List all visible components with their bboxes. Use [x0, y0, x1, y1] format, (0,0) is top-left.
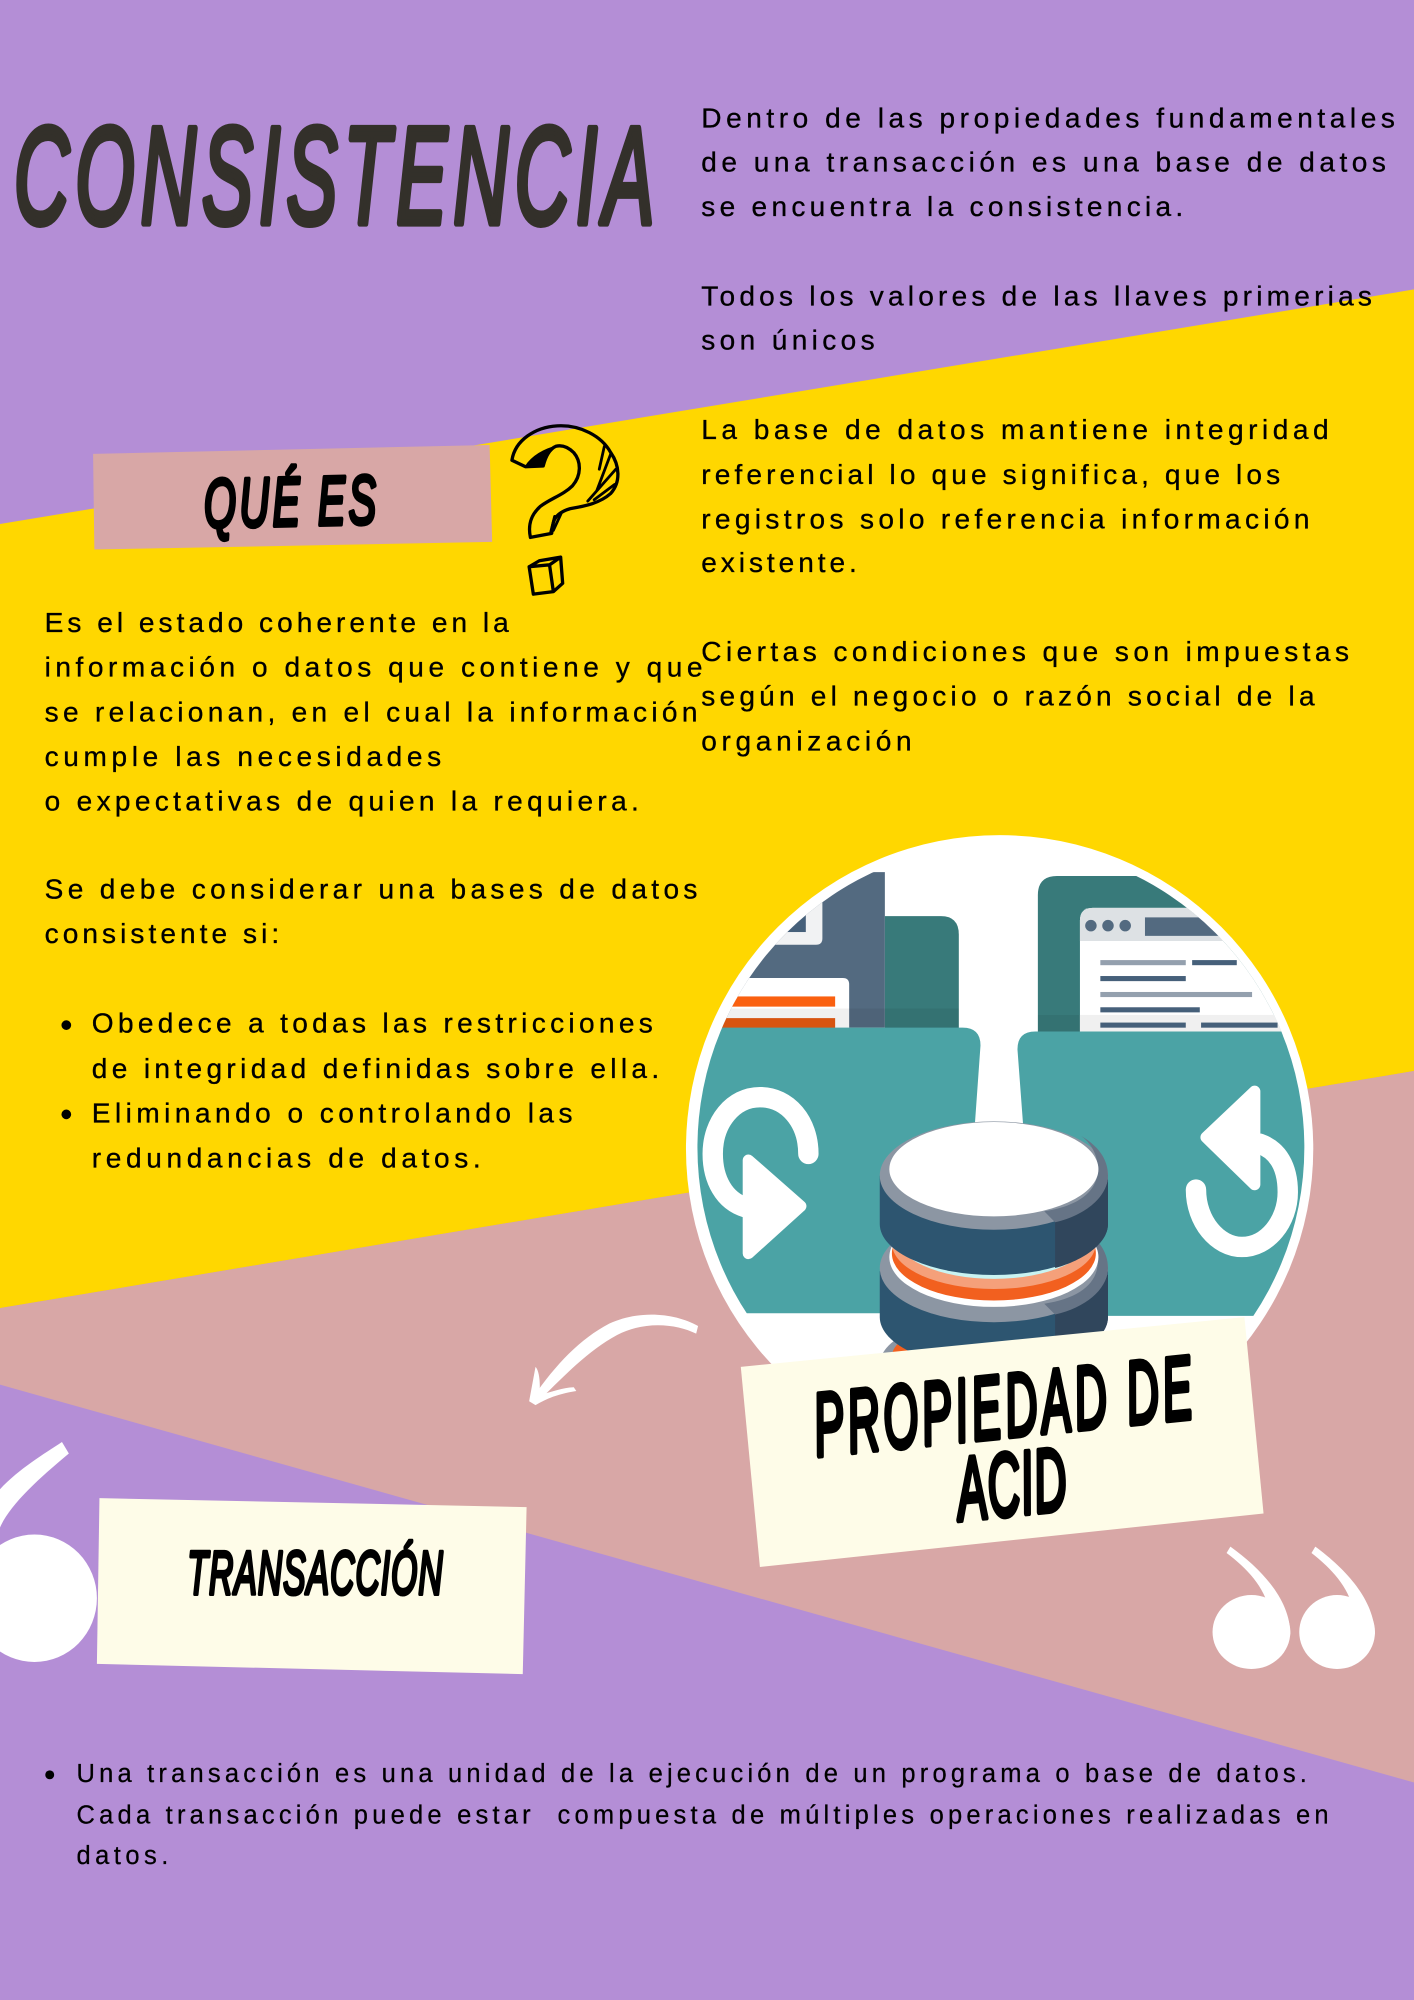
text block: qué es: se relacionan, en el cual la información: [45, 696, 697, 727]
text block: transacción: datos.: [77, 1842, 168, 1870]
text block: qué es: o expectativas de quien la requiera.: [45, 786, 639, 817]
illustration: database circle: [686, 835, 1314, 1364]
text block: propiedades: Dentro de las propiedades fundamentales: [701, 103, 1395, 134]
label: qué es: QUÉ ES: [203, 463, 377, 543]
text block: propiedades: Ciertas condiciones que son impuestas: [701, 636, 1349, 667]
text block: propiedades: referencial lo que significa, que los: [701, 459, 1280, 490]
bullet list: condiciones: [61, 1007, 659, 1173]
text block: qué es: Es el estado coherente en la: [45, 607, 509, 638]
text block: propiedades: se encuentra la consistencia.: [701, 191, 1183, 222]
bullet list: condiciones: Obedece a todas las restricciones: [92, 1007, 653, 1038]
text block: propiedades: [701, 103, 1395, 756]
text block: propiedades: según el negocio o razón social de la: [701, 681, 1315, 712]
label: propiedad de acid: ACID: [949, 1429, 1071, 1539]
text block: qué es: [45, 607, 703, 949]
title: CONSISTENCIA: [14, 98, 654, 253]
label: transacción: TRANSACCIÓN: [187, 1539, 443, 1607]
second tier: [880, 1271, 1108, 1368]
right folder: [995, 1031, 1313, 1316]
left quote mark: [0, 1442, 97, 1662]
label: transacción: [97, 1498, 527, 1674]
label: propiedad de acid: [741, 1317, 1264, 1567]
text block: propiedades: organización: [701, 725, 912, 756]
label: propiedad de acid: PROPIEDAD DE: [809, 1337, 1197, 1475]
text block: qué es: Se debe considerar una bases de datos: [45, 874, 697, 905]
bullet list: condiciones: de integridad definidas sobre ella.: [92, 1053, 659, 1084]
text block: propiedades: existente.: [701, 547, 857, 578]
icon: right arrow: [1196, 1091, 1288, 1247]
text block: propiedades: registros solo referencia información: [701, 503, 1309, 534]
text block: qué es: información o datos que contiene y que: [45, 652, 703, 683]
text block: qué es: cumple las necesidades: [45, 741, 441, 772]
icon: question mark: [512, 426, 618, 594]
text block: propiedades: son únicos: [701, 324, 875, 355]
left folder: [689, 1028, 995, 1313]
text block: transacción: Cada transacción puede estar compuesta de múltiples operaciones realizadas en: [77, 1801, 1329, 1829]
bullet list: condiciones: redundancias de datos.: [92, 1142, 481, 1173]
right quote mark: [1213, 1547, 1375, 1669]
text block: transacción: Una transacción es una unidad de la ejecución de un programa o base de datos.: [77, 1760, 1307, 1788]
text block: transacción: [45, 1760, 1329, 1870]
icon: database: [880, 1121, 1108, 1413]
text block: qué es: consistente si:: [45, 918, 279, 949]
text block: propiedades: Todos los valores de las llaves primerias: [701, 280, 1372, 311]
third tier: [880, 1316, 1108, 1413]
bullet list: condiciones: Eliminando o controlando las: [92, 1098, 572, 1129]
icon: left arrow: [713, 1097, 808, 1253]
top tier: [880, 1176, 1108, 1275]
right documents: [1038, 876, 1283, 1036]
left documents: [722, 872, 959, 1028]
label: qué es: [93, 445, 492, 550]
text block: propiedades: de una transacción es una base de datos: [701, 146, 1386, 177]
text block: propiedades: La base de datos mantiene integridad: [701, 414, 1329, 445]
arrow: [529, 1315, 698, 1405]
